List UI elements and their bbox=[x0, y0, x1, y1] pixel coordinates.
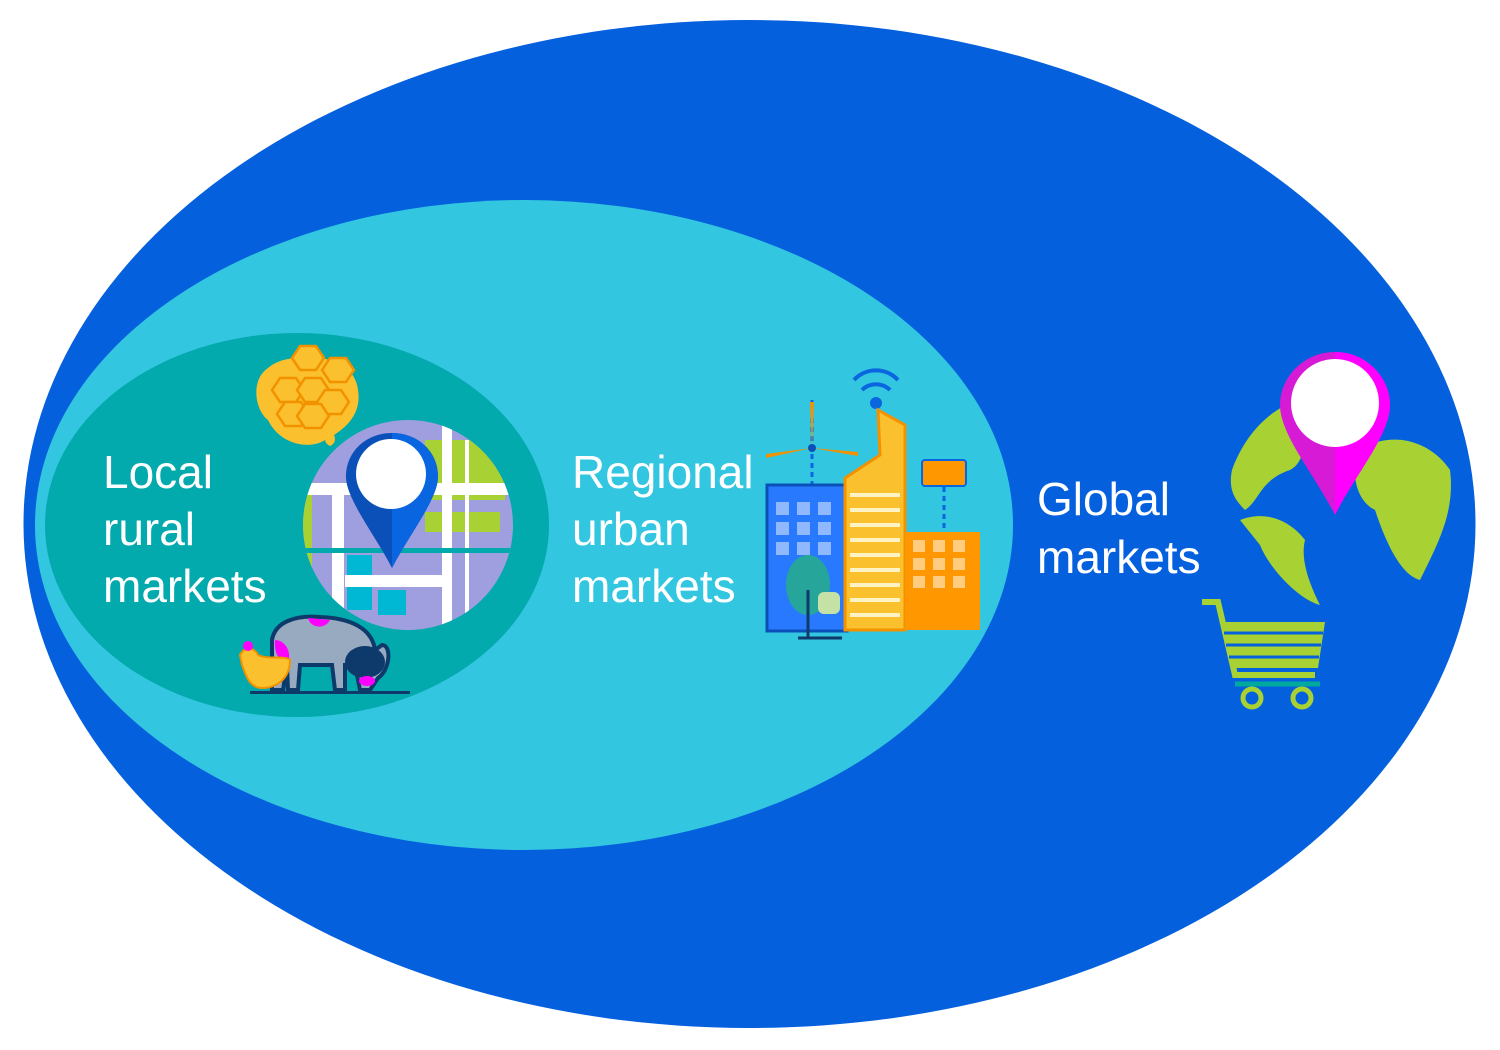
label: regional urban markets: Regional bbox=[572, 446, 754, 498]
panel: regional markets ellipse bbox=[35, 200, 1013, 850]
label: local rural markets: rural bbox=[103, 503, 195, 555]
label: regional urban markets: urban bbox=[572, 503, 690, 555]
icon: map with location pin bbox=[300, 420, 520, 633]
panel: local markets ellipse bbox=[45, 333, 549, 717]
label: global markets: Global bbox=[1037, 473, 1170, 525]
icon: globe with pin and cart bbox=[1202, 352, 1455, 707]
icon: honeycomb bbox=[256, 346, 359, 446]
label: global markets: markets bbox=[1037, 531, 1201, 583]
label: local rural markets: Local bbox=[103, 446, 213, 498]
label: local rural markets: markets bbox=[103, 560, 267, 612]
icon: city buildings bbox=[766, 370, 980, 638]
icon: cow and chicken bbox=[240, 617, 410, 694]
label: regional urban markets: markets bbox=[572, 560, 736, 612]
